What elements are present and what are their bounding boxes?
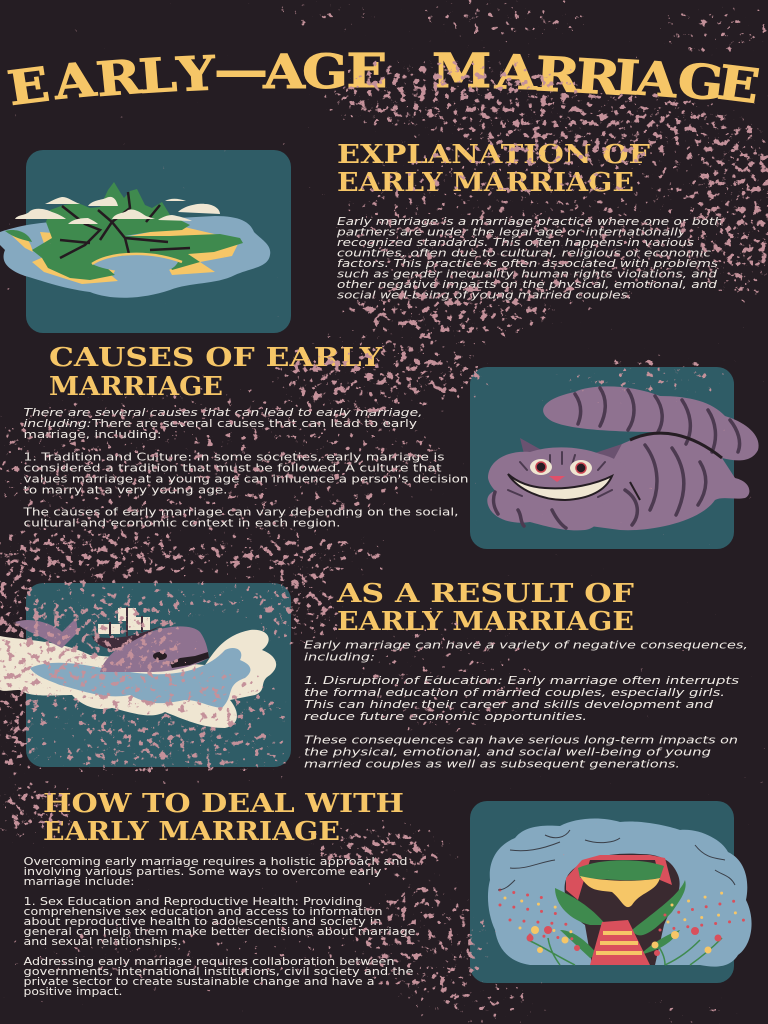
text block: result: Early marriage can have a variety of negative consequences, [304,640,748,652]
text block: result: the physical, emotional, and social well-being of young [304,746,711,758]
illustration card: cat [470,367,734,549]
heading: how to deal [43,789,404,847]
text block: how to deal: involving various parties. Some ways to overcome early [24,866,382,878]
text block: result: including: [304,652,375,664]
heading: causes [49,343,383,402]
panel: causes [22,343,759,549]
text block: result: This can hinder their career and skills development and [304,699,713,711]
text block: causes: There are several causes that can lead to early marriage, [24,407,422,419]
text block: explanation: social well-being of young married couples. [337,290,632,302]
title: EARLY—AGEMARRIAGE [4,42,763,116]
text block: how to deal: comprehensive sex education and access to information [24,906,382,918]
illustration card: island [26,150,291,333]
text block: causes: including: [24,418,92,430]
text block: how to deal: and sexual relationships. [24,936,182,948]
text block: result [304,640,748,770]
text block: how to deal: positive impact. [24,986,122,998]
text block: how to deal: private sector to create sustainable change and have a [24,976,374,988]
text block: causes: to marry at a very young age. [24,484,228,496]
icon: striped grinning cat [487,386,759,530]
text block: how to deal: general can help them make better decisions about marriage [24,926,416,938]
heading: explanation: EARLY MARRIAGE [337,168,634,198]
text block: how to deal: 1. Sex Education and Reproductive Health: Providing [24,896,362,908]
text block: explanation: other negative impacts on the physical, emotional, and [337,279,717,291]
text block: result: reduce future economic opportunities. [304,711,587,723]
text block: causes [22,407,469,530]
illustration card: tree path [470,801,734,983]
text block: explanation: Early marriage is a marriage practice where one or both [337,216,723,228]
text block: explanation: such as gender inequality, human rights violations, and [337,269,717,281]
text block: result: These consequences can have serious long-term impacts on [304,734,738,746]
heading: result: AS A RESULT OF [336,579,635,609]
text block: explanation: recognized standards. This often happens in various [337,237,695,249]
text block: causes: 1. Tradition and Culture: In some societies, early marriage is [24,452,444,464]
text block: explanation: factors. This practice is often associated with problems [337,258,719,270]
text block: result: the formal education of married couples, especially girls. [304,687,725,699]
heading: causes: CAUSES OF EARLY [49,343,383,373]
text block: causes: marriage, including: [24,429,162,441]
heading: result [336,579,635,637]
heading: how to deal: HOW TO DEAL WITH [43,789,404,819]
text block: explanation [336,216,723,302]
text block: how to deal: about reproductive health to adolescents and society in [24,916,382,928]
panel: how to deal [24,789,752,998]
icon: blue foliage opening with stairs and flowers [488,819,752,967]
heading: explanation: EXPLANATION OF [337,140,651,170]
text block: causes: values marriage at a young age can influence a person's decision [24,474,468,486]
text block: how to deal [24,856,416,998]
panel: result [0,579,748,770]
text block: how to deal: marriage include: [24,876,134,888]
text block: how to deal: Addressing early marriage requires collaboration between [24,956,395,968]
icon: island in water [0,182,270,298]
icon: whale and ship in foaming water [0,607,276,728]
heading: causes: MARRIAGE [49,372,223,402]
heading: result: EARLY MARRIAGE [337,607,634,637]
text block: result: married couples as well as subsequent generations. [304,758,680,770]
text block: causes: There are several causes that can lead to early [91,418,417,430]
text block: how to deal: Overcoming early marriage requires a holistic approach and [24,856,408,868]
text block: result: 1. Disruption of Education: Early marriage often interrupts [304,675,740,687]
text block: causes: cultural and economic context in each region. [24,518,340,530]
text block: causes: The causes of early marriage can vary depending on the social, [22,506,459,518]
text block: how to deal: governments, international institutions, civil society and the [24,966,414,978]
panel: explanation [0,140,723,333]
heading: explanation [337,140,651,198]
heading: how to deal: EARLY MARRIAGE [43,817,340,847]
text block: explanation: countries, often due to cultural, religious or economic [337,248,711,260]
text block: causes: considered a tradition that must be followed. A culture that [24,462,442,474]
illustration card: whale [26,583,291,767]
text block: explanation: partners are under the legal age or internationally [336,226,687,238]
